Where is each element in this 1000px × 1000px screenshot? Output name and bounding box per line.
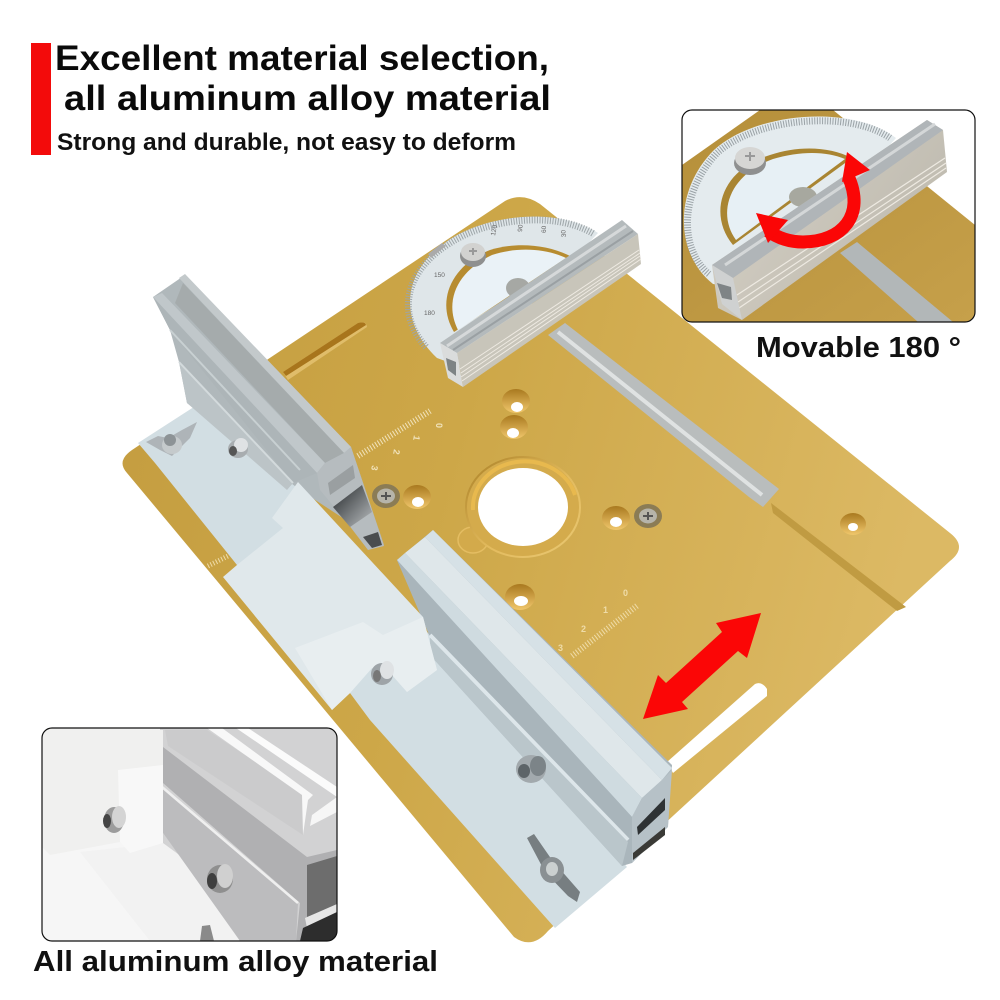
detail profile opening xyxy=(307,856,337,917)
countersunk holes xyxy=(403,389,866,610)
inset screws xyxy=(734,147,817,207)
rear fence xyxy=(153,274,384,550)
inset gold plate xyxy=(682,110,975,322)
inset caption: Movable 180 ° xyxy=(756,332,961,364)
inset: aluminum detail xyxy=(42,728,337,941)
red accent bar xyxy=(31,43,51,155)
inset caption: All aluminum alloy material xyxy=(33,946,438,978)
detail rails background xyxy=(160,728,337,941)
engraved ruler lower: 2 xyxy=(581,624,586,634)
protractor: 180 xyxy=(424,310,435,317)
detail bolts xyxy=(103,806,233,941)
nylon block xyxy=(223,482,437,710)
screws xyxy=(372,484,662,528)
arrow: slide direction xyxy=(643,613,761,719)
protractor: 30 xyxy=(560,229,568,237)
engraved ruler lower: 1 xyxy=(603,605,608,615)
engraved ruler margin xyxy=(208,556,228,566)
wing nut rear xyxy=(146,422,197,456)
protractor xyxy=(408,217,598,370)
detail nylon block xyxy=(160,730,163,766)
protractor: 150 xyxy=(434,272,445,279)
engraved ruler upper: 3 xyxy=(369,465,380,471)
engraved ruler upper: 2 xyxy=(391,449,402,455)
engraved ruler upper: 1 xyxy=(411,435,422,441)
engraved ruler lower: 3 xyxy=(558,643,563,653)
detail upper rail xyxy=(163,747,337,941)
front fence xyxy=(397,530,672,866)
engraved ruler upper xyxy=(358,411,444,471)
detail lower rail xyxy=(161,787,298,941)
protractor fence xyxy=(440,220,641,387)
lower right slot xyxy=(667,683,767,773)
wing nut front xyxy=(527,834,580,902)
subtitle: Strong and durable, not easy to deform xyxy=(57,129,516,156)
mitre track xyxy=(548,323,779,507)
front fence end face xyxy=(632,770,672,863)
inset: movable protractor xyxy=(682,110,975,322)
inset protractor xyxy=(684,116,896,290)
mitre groove xyxy=(771,503,906,611)
protractor: 60 xyxy=(541,225,548,233)
bolts xyxy=(228,438,546,783)
detail base plate xyxy=(160,843,240,940)
protractor: 90 xyxy=(517,224,525,232)
centre hole with recess xyxy=(458,457,580,557)
gold plate xyxy=(123,197,959,942)
title: all aluminum alloy material xyxy=(64,79,551,118)
engraved ruler upper: 0 xyxy=(434,423,444,428)
upper left slot xyxy=(283,322,367,380)
inset track xyxy=(840,242,953,322)
title xyxy=(55,39,551,118)
rear fence end face xyxy=(317,447,384,550)
engraved ruler lower: 0 xyxy=(623,588,628,598)
engraved ruler lower xyxy=(558,588,638,656)
detail top flange xyxy=(165,730,303,835)
product: router table plate xyxy=(123,197,959,942)
inset fence xyxy=(712,120,947,320)
inset curved arrow xyxy=(756,152,870,243)
protractor: 120 xyxy=(490,224,499,236)
title: Excellent material selection, xyxy=(55,39,549,78)
base plate xyxy=(138,403,627,928)
